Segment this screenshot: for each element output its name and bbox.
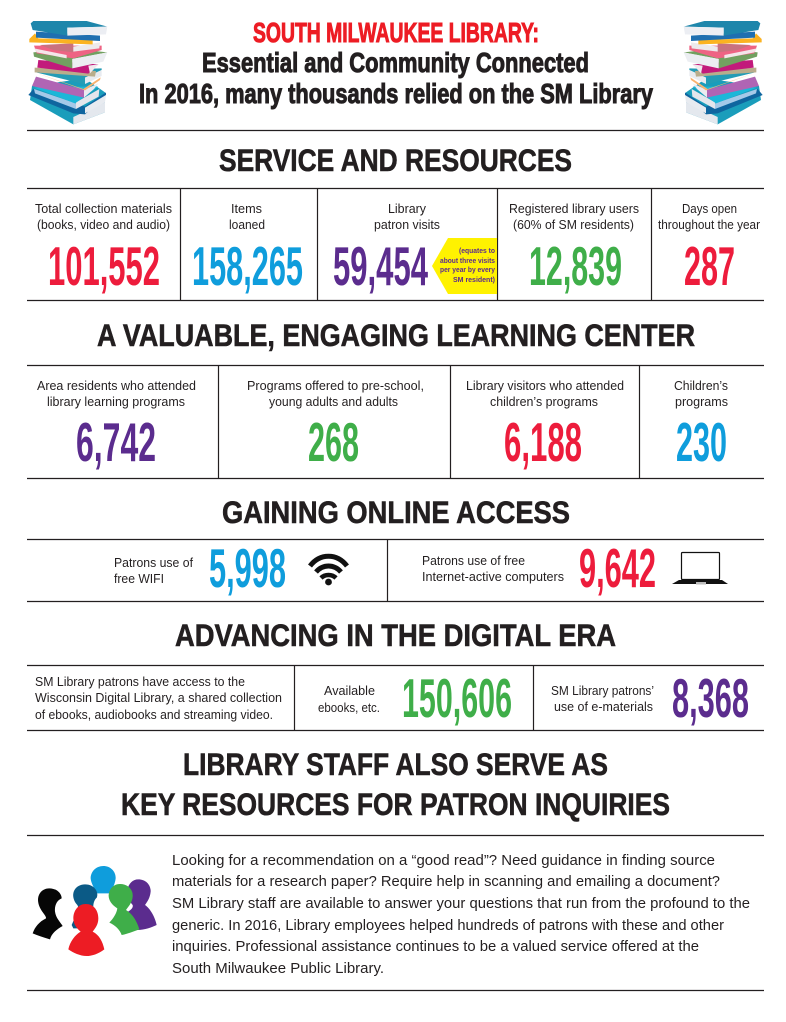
- stat: wifi: Patrons use of: [114, 556, 194, 570]
- stat: library patron visits: Library: [388, 202, 427, 216]
- text: wisconsin digital library: [35, 675, 282, 722]
- stat: library visitors: [466, 379, 624, 473]
- title: Essential and Community Connected: [202, 47, 589, 78]
- stat: available ebooks: 150,606: [402, 667, 512, 729]
- heading: library staff: [121, 746, 670, 822]
- text block: staff assistance: generic. In 2016, Library employees helped hundreds of patrons with these and other: [172, 918, 724, 934]
- stat: library patron visits: patron visits: [374, 218, 440, 232]
- text: wisconsin digital library: SM Library patrons have access to the: [35, 675, 245, 689]
- stat: childrens programs: Children’s: [674, 379, 728, 393]
- stat: total collection materials: Total collection materials: [35, 202, 172, 216]
- stat: e-materials use: SM Library patrons’: [551, 684, 654, 698]
- stat: e-materials use: use of e-materials: [554, 700, 653, 714]
- stat: library patron visits: [333, 202, 440, 297]
- stat: registered library users: [509, 202, 639, 297]
- stat: library visitors: Library visitors who attended: [466, 379, 624, 393]
- heading: online access: GAINING ONLINE ACCESS: [222, 494, 570, 530]
- stat: total collection materials: [35, 202, 172, 297]
- icon: laptop: [672, 552, 728, 584]
- panel: digital era stats: [27, 665, 764, 730]
- heading: library staff: LIBRARY STAFF ALSO SERVE AS: [183, 746, 608, 782]
- stat: library visitors: 6,188: [504, 411, 582, 473]
- stat: wifi: free WIFI: [114, 572, 164, 586]
- title: In 2016, many thousands relied on the SM Library: [139, 78, 654, 109]
- stat: items loaned: [192, 202, 303, 297]
- stat: childrens programs: [674, 379, 728, 473]
- panel: learning center stats: [27, 365, 764, 478]
- stat: days open: 287: [684, 235, 735, 297]
- text: wisconsin digital library: Wisconsin Digital Library, a shared collection: [35, 691, 282, 705]
- stat: available ebooks: Available: [324, 684, 375, 698]
- stat: area residents: library learning programs: [47, 395, 185, 409]
- title: [139, 17, 654, 109]
- stat: total collection materials: (books, video and audio): [37, 218, 170, 232]
- stat: registered library users: (60% of SM residents): [513, 218, 634, 232]
- panel: online access stats: [27, 537, 764, 602]
- callout: about three visits: [432, 238, 497, 294]
- stat: library visitors: children’s programs: [490, 395, 598, 409]
- text block: staff assistance: South Milwaukee Public Library.: [172, 961, 384, 977]
- title: SOUTH MILWAUKEE LIBRARY:: [253, 17, 539, 48]
- stat: items loaned: 158,265: [192, 235, 303, 297]
- icon: book stack right: [684, 21, 763, 124]
- heading: library staff: KEY RESOURCES FOR PATRON INQUIRIES: [121, 786, 670, 822]
- stat: days open: Days open: [682, 202, 737, 216]
- icon: group of people: [33, 866, 157, 956]
- stat: e-materials use: [551, 667, 749, 729]
- text block: staff assistance: SM Library staff are available to answer your questions that run from the profound to the: [172, 896, 750, 912]
- stat: days open: throughout the year: [658, 218, 760, 232]
- stat: computers: [422, 537, 656, 599]
- stat: programs offered: young adults and adults: [269, 395, 398, 409]
- text block: staff assistance: [172, 853, 750, 977]
- panel: service and resources stats: [27, 188, 764, 300]
- heading: learning center: A VALUABLE, ENGAGING LEARNING CENTER: [97, 317, 695, 353]
- stat: registered library users: Registered library users: [509, 202, 639, 216]
- callout: about three visits: SM resident): [453, 275, 495, 284]
- callout: about three visits: per year by every: [440, 265, 496, 274]
- stat: computers: Internet-active computers: [422, 570, 564, 584]
- stat: area residents: Area residents who attended: [37, 379, 196, 393]
- stat: available ebooks: [318, 667, 512, 729]
- stat: items loaned: loaned: [229, 218, 265, 232]
- stat: days open: [658, 202, 760, 297]
- stat: computers: 9,642: [579, 537, 656, 599]
- stat: childrens programs: programs: [675, 395, 728, 409]
- text: wisconsin digital library: of ebooks, audiobooks and streaming video.: [35, 708, 273, 722]
- stat: registered library users: 12,839: [529, 235, 622, 297]
- icon: book stack left: [28, 21, 107, 124]
- text block: staff assistance: inquiries. Professional assistance continues to be a valued service offered at the: [172, 939, 699, 955]
- stat: items loaned: Items: [231, 202, 262, 216]
- icon: wifi: [310, 556, 347, 585]
- stat: area residents: 6,742: [76, 411, 156, 473]
- stat: total collection materials: 101,552: [48, 235, 160, 297]
- stat: programs offered: Programs offered to pre-school,: [247, 379, 424, 393]
- text block: staff assistance: materials for a research paper? Require help in scanning and emailing a document?: [172, 874, 720, 890]
- stat: programs offered: 268: [308, 411, 359, 473]
- stat: childrens programs: 230: [676, 411, 727, 473]
- stat: wifi: [114, 537, 286, 599]
- heading: service and resources: SERVICE AND RESOURCES: [219, 142, 572, 178]
- stat: computers: Patrons use of free: [422, 554, 525, 568]
- heading: digital era: ADVANCING IN THE DIGITAL ERA: [175, 617, 616, 653]
- text block: staff assistance: Looking for a recommendation on a “good read”? Need guidance in finding source: [172, 853, 715, 869]
- stat: available ebooks: ebooks, etc.: [318, 701, 380, 715]
- stat: library patron visits: 59,454: [333, 235, 428, 297]
- stat: area residents: [37, 379, 196, 473]
- callout: about three visits: about three visits: [440, 256, 495, 265]
- callout: about three visits: (equates to: [459, 246, 495, 255]
- stat: programs offered: [247, 379, 424, 473]
- stat: wifi: 5,998: [209, 537, 286, 599]
